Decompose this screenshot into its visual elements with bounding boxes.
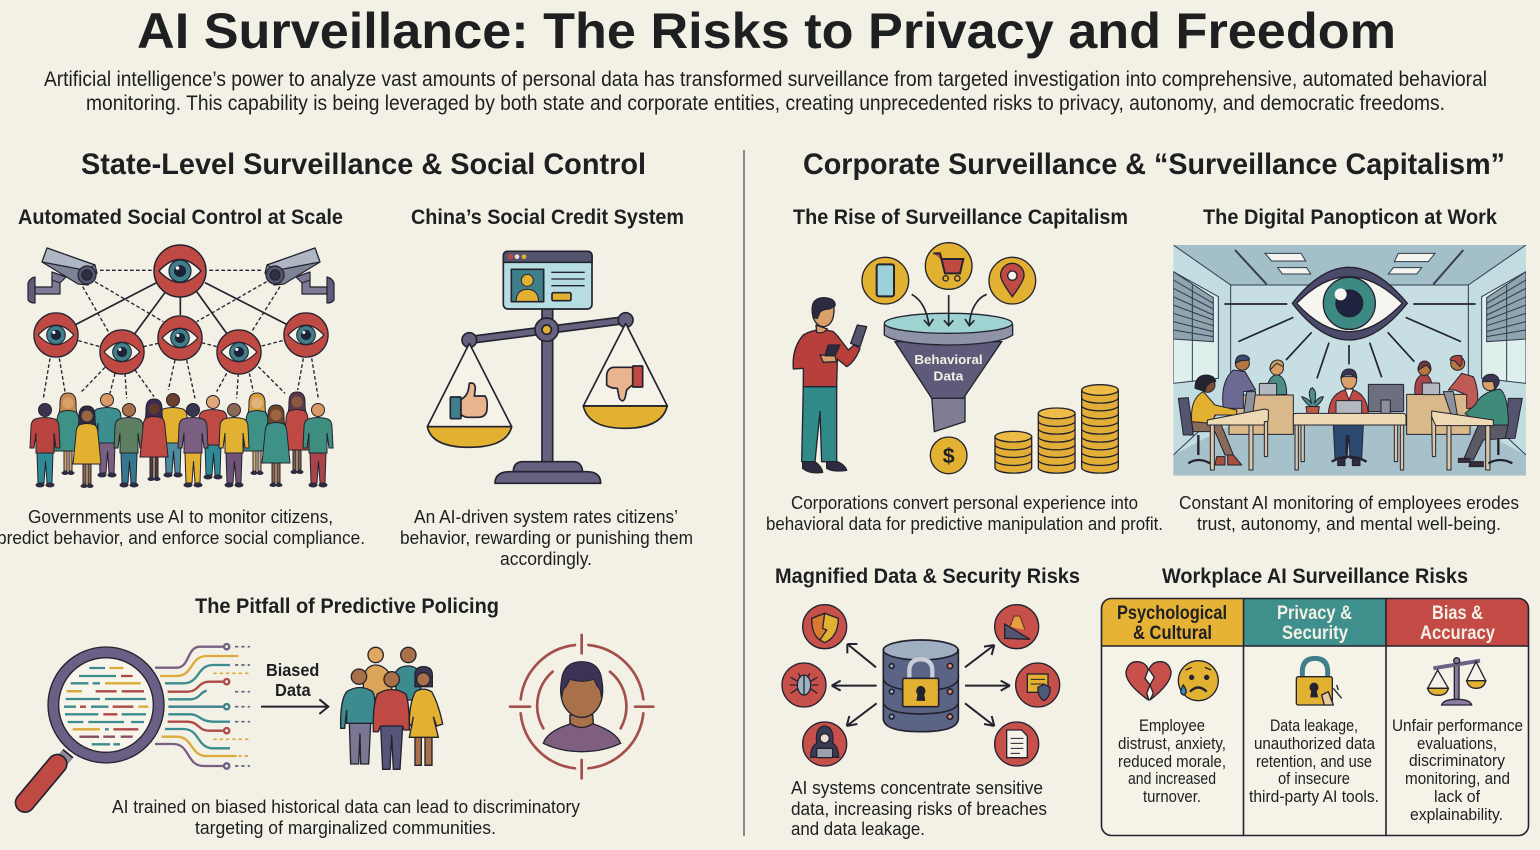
- heading: workplace risks: Workplace AI Surveillance Risks: [1162, 564, 1468, 588]
- body text: automated social control: Governments use AI to monitor citizens,: [28, 506, 333, 527]
- intro text: [44, 68, 1487, 115]
- panel: workplace AI surveillance risks table: [1102, 564, 1528, 836]
- column: bias and accuracy: Bias &: [1432, 603, 1483, 624]
- column: bias and accuracy: Accuracy: [1420, 623, 1495, 644]
- icon: scales: [1428, 658, 1486, 705]
- group of targeted people: [341, 647, 443, 769]
- heading: data and security risks: Magnified Data & Security Risks: [775, 564, 1080, 588]
- text: psychological and cultural: Employee: [1139, 716, 1205, 735]
- text: bias and accuracy: evaluations,: [1417, 734, 1497, 753]
- panel: automated social control: [0, 205, 365, 548]
- body text: panopticon: [1179, 492, 1519, 534]
- icon: target on person: [510, 635, 653, 778]
- body text: social credit: accordingly.: [500, 548, 592, 569]
- panel: surveillance capitalism: [766, 205, 1163, 534]
- panel: data and security risks: [775, 564, 1080, 839]
- icon: broken heart and crying face: [1126, 661, 1218, 701]
- column: privacy and security: [1244, 598, 1386, 806]
- person using phones: [793, 298, 867, 473]
- text: privacy and security: third-party AI tools.: [1249, 787, 1379, 806]
- panel: digital panopticon: [1173, 205, 1526, 534]
- body text: predictive policing: targeting of marginalized communities.: [195, 817, 496, 838]
- crowd of citizens: [30, 392, 333, 488]
- text: privacy and security: Data leakage,: [1270, 716, 1358, 735]
- heading: automated social control: Automated Social Control at Scale: [18, 205, 343, 229]
- panel: predictive policing: [25, 594, 653, 838]
- center desk: [1293, 413, 1406, 425]
- column: psychological and cultural: & Cultural: [1133, 623, 1212, 644]
- heading: rise of surveillance capitalism: The Rise of Surveillance Capitalism: [793, 205, 1128, 229]
- body text: surveillance capitalism: [766, 492, 1163, 534]
- body text: data risks: [791, 777, 1047, 839]
- body text: data risks: AI systems concentrate sensitive: [791, 777, 1043, 798]
- text: bias and accuracy: monitoring, and: [1405, 769, 1510, 788]
- body text: social credit: [400, 506, 693, 569]
- icon: magnifying glass: [25, 647, 164, 803]
- arrow: biased data to people: [261, 699, 328, 714]
- body text: social credit: behavior, rewarding or punishing them: [400, 527, 693, 548]
- column: bias and accuracy: [1386, 598, 1528, 824]
- coin stacks: [995, 385, 1118, 473]
- text: privacy and security: of insecure: [1278, 769, 1350, 788]
- left pan with thumbs up: [427, 343, 512, 447]
- icon: threat circles: [782, 605, 1060, 766]
- right pan with thumbs down: [583, 323, 667, 428]
- label: biased data: Biased: [266, 660, 319, 680]
- icon: surveillance eyes: [34, 245, 328, 374]
- body text: predictive policing: [112, 796, 581, 838]
- text: bias and accuracy: lack of: [1434, 787, 1480, 806]
- plant: [1302, 388, 1323, 408]
- monitoring rays: [1224, 304, 1476, 378]
- label: biased data: Data: [275, 680, 312, 700]
- icon: giant eye: [1292, 267, 1407, 340]
- label: biased data: [266, 660, 319, 700]
- panel: china's social credit system: [400, 205, 693, 569]
- column: psychological and cultural: Psychological: [1117, 603, 1227, 624]
- text: bias and accuracy: discriminatory: [1409, 751, 1505, 770]
- arrows from database: [832, 644, 1010, 726]
- intro text: monitoring. This capability is being leveraged by both state and corporate entities, creating unprecedented risks to privacy, autonomy, and democratic freedoms.: [86, 92, 1445, 115]
- column: privacy and security: Privacy &: [1277, 603, 1352, 624]
- text: privacy and security: retention, and use: [1256, 752, 1372, 771]
- icon: dollar coin: [930, 437, 967, 474]
- text: psychological and cultural: [1118, 716, 1226, 806]
- scale post and base: [462, 308, 633, 483]
- text: bias and accuracy: explainability.: [1410, 805, 1503, 824]
- text: psychological and cultural: and increased: [1128, 769, 1216, 788]
- body text: panopticon: Constant AI monitoring of employees erodes: [1179, 492, 1519, 513]
- body text: surveillance capitalism: behavioral data for predictive manipulation and profit.: [766, 513, 1163, 534]
- icon: padlock: [1296, 658, 1342, 705]
- body text: social credit: An AI-driven system rates citizens’: [414, 506, 678, 527]
- icon: dollar coin: $: [943, 444, 955, 468]
- body text: automated social control: predict behavior, and enforce social compliance.: [0, 527, 365, 548]
- right worker: [1505, 398, 1522, 438]
- text: privacy and security: unauthorized data: [1254, 734, 1375, 753]
- column: psychological and cultural: [1102, 598, 1244, 806]
- left worker: [1178, 398, 1193, 435]
- windows and blinds: [1173, 272, 1526, 383]
- heading: china's social credit: China’s Social Credit System: [411, 205, 684, 229]
- text: privacy and security: [1249, 716, 1379, 806]
- icon: data source circles: [862, 243, 1036, 304]
- icon: database with padlock: [883, 640, 958, 732]
- heading: predictive policing: The Pitfall of Predictive Policing: [195, 594, 499, 618]
- column: privacy and security: Security: [1282, 623, 1348, 644]
- center worker: [1333, 425, 1363, 458]
- text: psychological and cultural: reduced morale,: [1118, 752, 1226, 771]
- text: bias and accuracy: Unfair performance: [1392, 716, 1523, 735]
- section heading: state-level: State-Level Surveillance & Social Control: [81, 148, 646, 181]
- title: AI Surveillance: The Risks to Privacy and Freedom: [137, 3, 1396, 59]
- body text: surveillance capitalism: Corporations convert personal experience into: [791, 492, 1138, 513]
- ceiling lights: [1265, 253, 1435, 274]
- icon: cameras: [28, 248, 334, 303]
- heading: digital panopticon: The Digital Panopticon at Work: [1203, 205, 1497, 229]
- icon: funnel: Data: [933, 369, 964, 384]
- body text: panopticon: trust, autonomy, and mental well-being.: [1197, 513, 1501, 534]
- network diagram: [28, 245, 334, 488]
- office workers and desks: [1178, 355, 1522, 470]
- profile card: [503, 251, 592, 309]
- text: psychological and cultural: distrust, anxiety,: [1118, 734, 1226, 753]
- body text: data risks: and data leakage.: [791, 818, 925, 839]
- body text: predictive policing: AI trained on biased historical data can lead to discriminatory: [112, 796, 581, 817]
- office illustration: [1173, 245, 1526, 476]
- section heading: corporate: Corporate Surveillance & “Surveillance Capitalism”: [803, 148, 1505, 181]
- icon: funnel: Behavioral: [914, 352, 983, 367]
- body text: automated social control: [0, 506, 365, 548]
- icon: balance scale with citizen profile: [427, 251, 667, 483]
- text: bias and accuracy: [1392, 716, 1523, 824]
- icon: funnel: [884, 294, 1013, 432]
- body text: data risks: data, increasing risks of breaches: [791, 798, 1047, 819]
- data stream lines: [155, 644, 250, 769]
- text: psychological and cultural: turnover.: [1143, 787, 1201, 806]
